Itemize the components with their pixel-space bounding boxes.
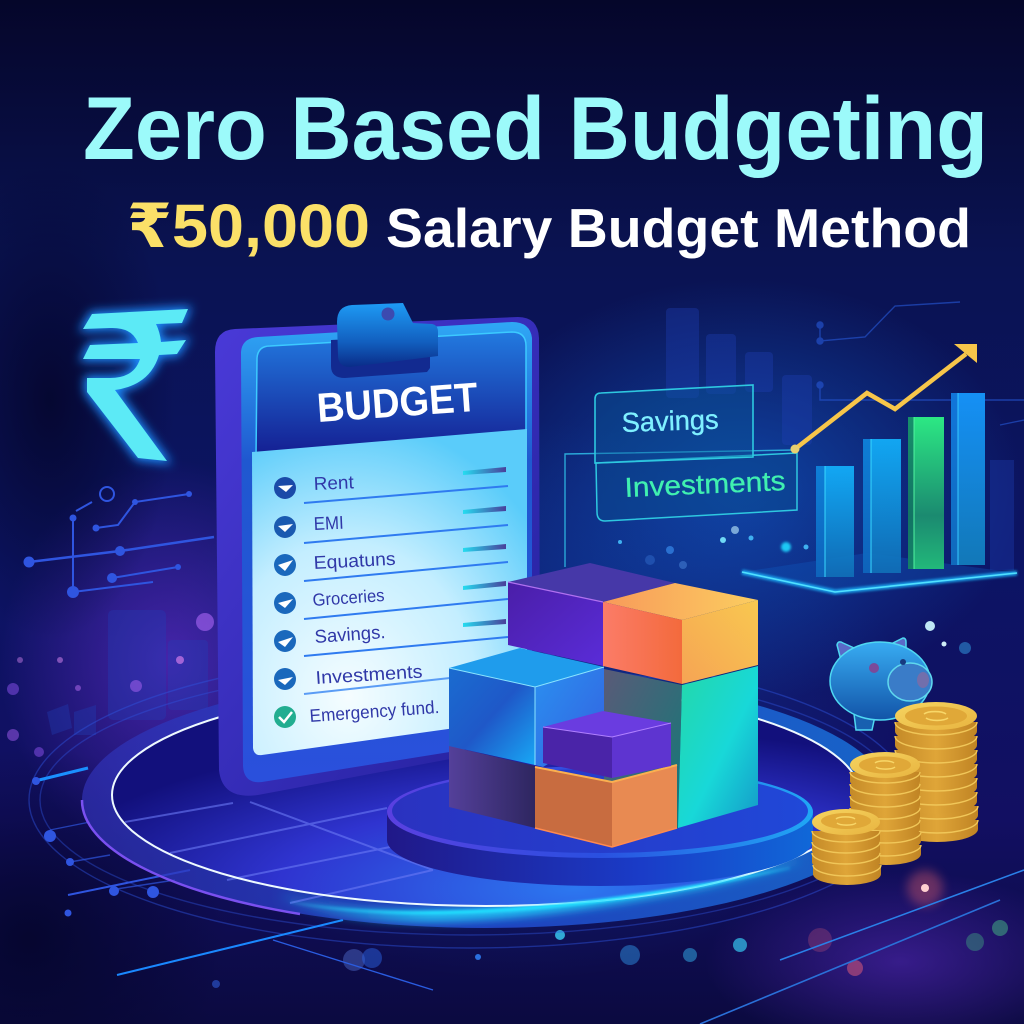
cyan glow arc — [280, 860, 800, 916]
block: teal — [604, 666, 758, 828]
floor grid — [125, 802, 433, 903]
item: groceries: Groceries — [312, 585, 385, 610]
circuit lines right — [817, 302, 1024, 425]
panel: investments label: Investments — [624, 465, 786, 503]
panel: budget clipboard — [215, 303, 540, 796]
item: rent: Rent — [313, 471, 354, 494]
item: equatuns: Equatuns — [313, 548, 396, 573]
item: investments — [274, 660, 450, 694]
white ring — [112, 684, 860, 906]
panel: investments label — [565, 450, 797, 567]
item: emergency fund: Emergency fund. — [309, 697, 440, 726]
bar 1 — [816, 466, 854, 577]
item: rent — [274, 467, 508, 503]
bar chart — [742, 344, 1017, 592]
clipboard header — [256, 332, 526, 458]
item: investments: Investments — [315, 660, 423, 688]
heading: budget: BUDGET — [315, 374, 479, 431]
title: Zero Based Budgeting — [83, 78, 988, 178]
item: groceries — [274, 581, 508, 619]
subtitle: ₹50,000 — [127, 192, 370, 260]
background bar silhouettes — [47, 308, 1014, 735]
block: top purple — [508, 563, 675, 666]
panel: savings label — [595, 385, 753, 463]
item: savings: Savings. — [314, 621, 386, 647]
panel: savings label: Savings — [621, 404, 719, 438]
block: dark base — [449, 746, 535, 828]
block: small purple — [543, 711, 671, 778]
bar 4 — [951, 393, 985, 565]
block: small orange — [535, 765, 677, 847]
clipboard front plate — [241, 322, 532, 782]
clipboard clip — [331, 303, 438, 378]
inner floor — [112, 684, 860, 906]
arrow: growth trend — [790, 344, 977, 454]
outer orbit lines — [29, 652, 1024, 1024]
clipboard back plate — [215, 317, 540, 796]
bar 3 — [908, 417, 944, 569]
circuit lines left — [24, 487, 214, 598]
subtitle — [127, 192, 971, 260]
subtitle: Salary Budget Method — [386, 197, 971, 259]
icon: piggy bank — [830, 638, 932, 730]
outer band — [82, 672, 890, 928]
block: blue — [449, 648, 604, 767]
ground rings — [29, 652, 1024, 1024]
item: emi: EMI — [313, 512, 344, 534]
panel: stacked blocks on platform — [387, 563, 813, 886]
coin stack medium — [850, 752, 921, 865]
icon: coin stacks — [812, 702, 978, 885]
particles — [7, 526, 1008, 988]
icon: glowing rupee symbol — [83, 309, 188, 461]
coin stack small — [812, 809, 881, 885]
chart floor — [742, 553, 1017, 592]
item: savings — [274, 619, 508, 656]
block: top orange — [603, 583, 758, 684]
bar 2 — [863, 439, 901, 573]
platform — [387, 766, 813, 886]
item: equatuns — [274, 544, 508, 581]
coin stack large — [895, 702, 978, 842]
paper sheet — [252, 429, 527, 755]
item: emi — [274, 506, 508, 543]
